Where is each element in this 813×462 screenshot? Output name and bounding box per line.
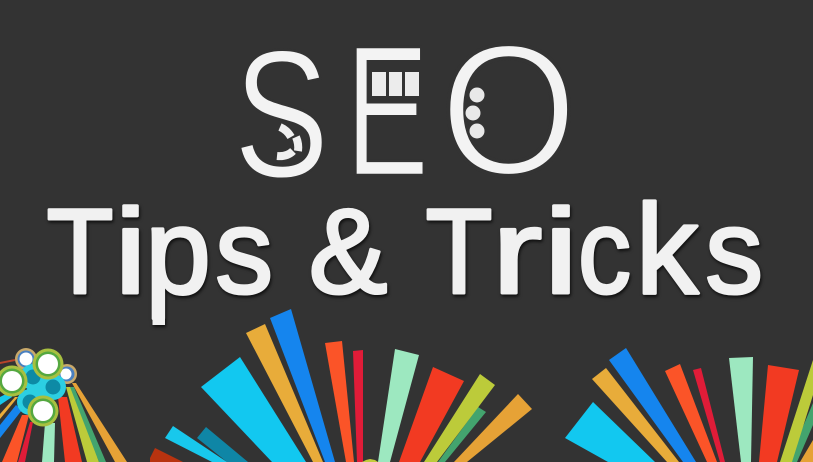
right ray burst — [565, 348, 813, 462]
subtitle: Tips & Tricks: s — [215, 185, 273, 320]
letter E with three blocks: E — [346, 7, 429, 215]
cyan and teal circles — [17, 364, 66, 415]
subtitle: Tips & Tricks — [46, 178, 763, 325]
large green circles — [0, 348, 64, 426]
letter S with dashed ring: S — [234, 12, 329, 216]
subtitle: Tips & Tricks: s — [705, 185, 763, 320]
subtitle: Tips & Tricks: p — [145, 184, 211, 319]
centre ray burst — [150, 309, 532, 462]
subtitle: Tips & Tricks: & — [309, 185, 387, 319]
subtitle: Tips & Tricks: i — [544, 184, 578, 319]
subtitle: Tips & Tricks: c — [578, 185, 631, 320]
left rays — [0, 359, 127, 462]
letter O with three dots: O — [440, 7, 577, 214]
subtitle: Tips & Tricks: i — [114, 185, 147, 319]
subtitle: Tips & Tricks: T — [46, 185, 114, 319]
title: SEO — [234, 7, 577, 216]
subtitle: Tips & Tricks: T — [426, 185, 493, 319]
subtitle: Tips & Tricks: k — [636, 178, 699, 320]
small tan circles — [15, 348, 77, 384]
subtitle: Tips & Tricks: r — [492, 184, 542, 319]
left ray burst with circles — [0, 348, 127, 462]
